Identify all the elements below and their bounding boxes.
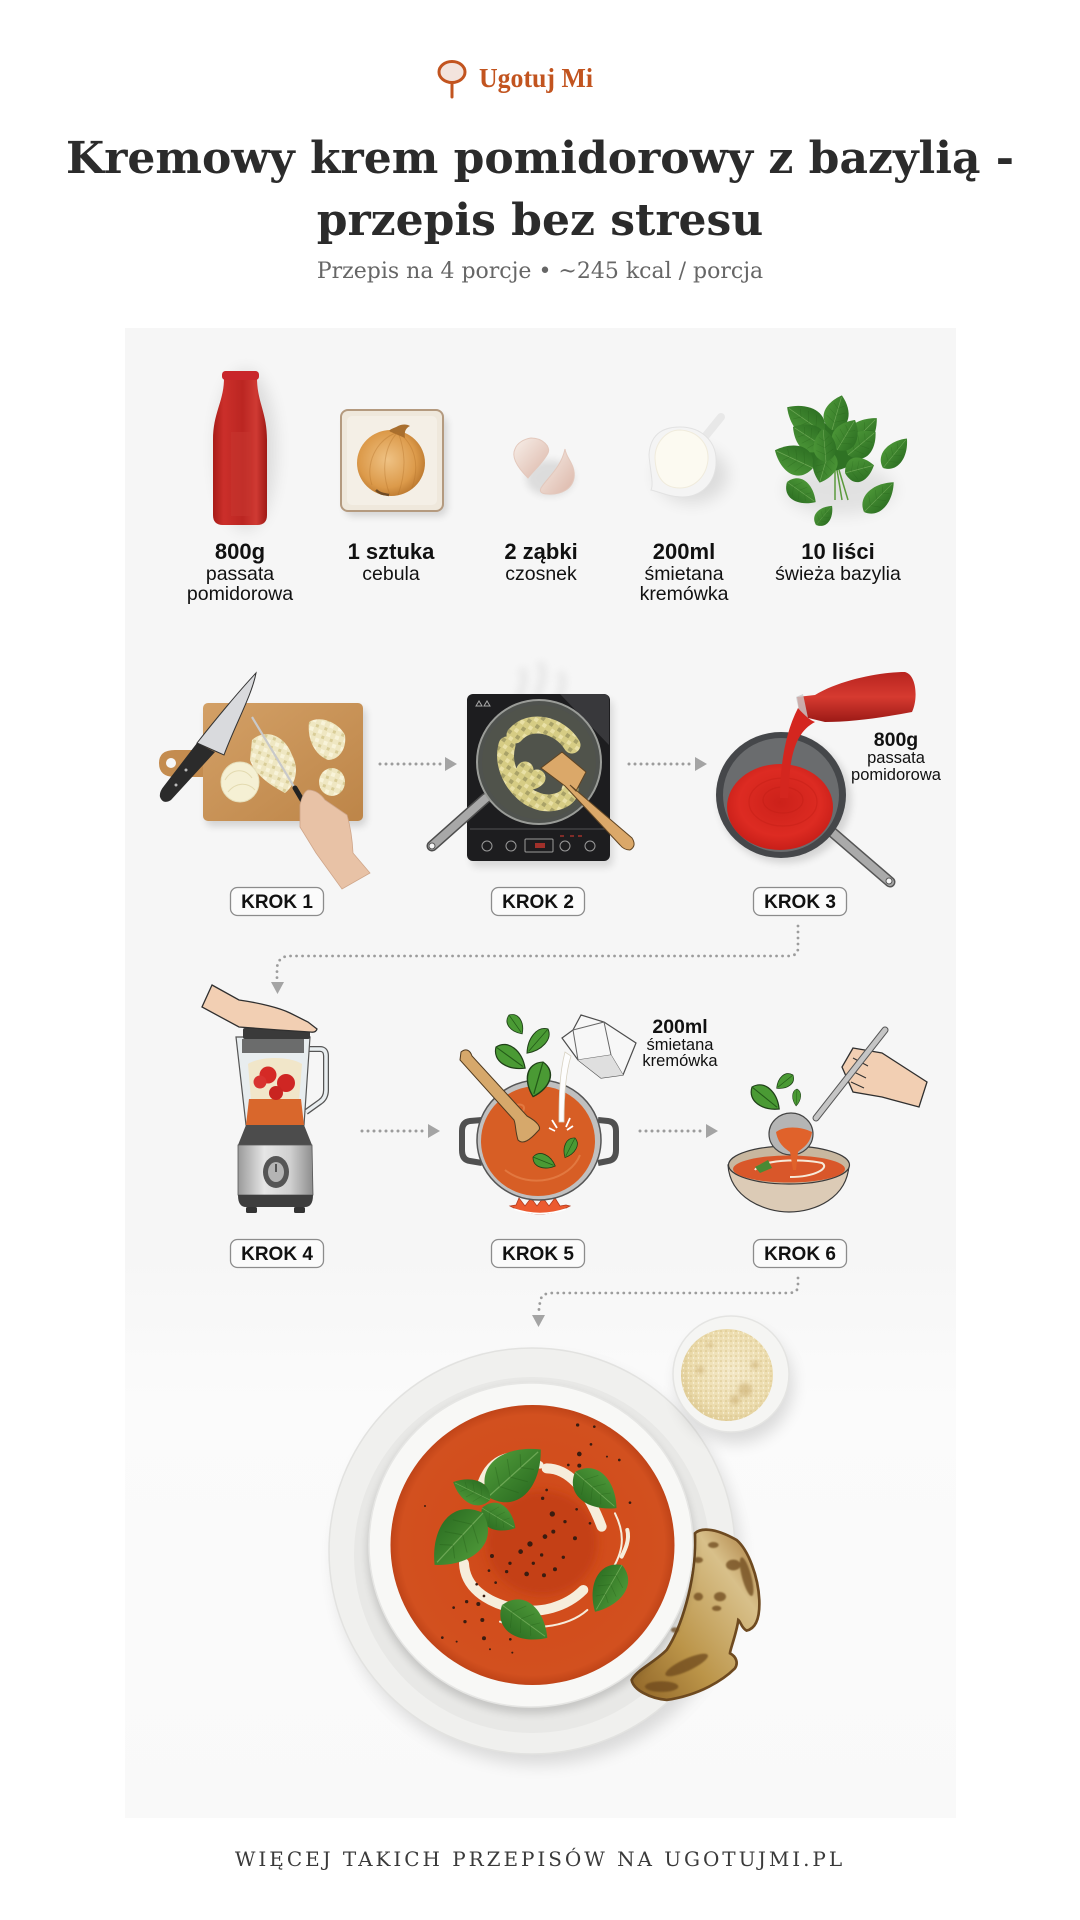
- wooden spoon: [460, 1050, 540, 1142]
- badge: KROK 5: [492, 1240, 584, 1268]
- basil garnish: [418, 1432, 636, 1652]
- arrow: step 4 to 5: [362, 1124, 440, 1138]
- label: 200ml śmietana kremówka: kremówka: [642, 1052, 718, 1070]
- ingredient: passata bottle: [213, 370, 276, 530]
- induction hob: [467, 694, 613, 867]
- ingredient: garlic cloves: [514, 438, 574, 496]
- ladle: [769, 1030, 885, 1170]
- step 2: frying on induction hob: [429, 662, 634, 867]
- badge: KROK 5: KROK 5: [502, 1244, 574, 1265]
- wooden spatula: [541, 752, 634, 850]
- arrow: step 1 to 2: [380, 757, 457, 771]
- badge: KROK 2: [492, 888, 584, 916]
- label: 1 sztuka cebula: 1 sztuka: [348, 539, 435, 564]
- badge: KROK 4: KROK 4: [241, 1244, 313, 1265]
- label: 800g passata pomidorowa: 800g: [874, 729, 918, 751]
- label: 1 sztuka cebula: [348, 539, 435, 585]
- chopped onion piles and half onion: [221, 719, 345, 802]
- label: 10 liści świeża bazylia: [775, 539, 901, 585]
- label: 800g passata pomidorowa: [187, 539, 293, 605]
- label: 800g passata pomidorowa: 800g: [215, 539, 265, 564]
- cream carton pouring: [549, 1015, 636, 1131]
- ingredient: basil leaves: [769, 392, 915, 530]
- label: 200ml śmietana kremówka: śmietana: [647, 1036, 714, 1054]
- badge: KROK 6: [754, 1240, 846, 1268]
- label: 200ml śmietana kremówka: śmietana: [644, 563, 724, 585]
- title: Kremowy krem pomidorowy z bazylią -: [66, 133, 1014, 184]
- badge: KROK 1: [230, 888, 324, 916]
- frying pan with onion: [429, 700, 601, 849]
- soup bowl: [367, 1383, 695, 1714]
- label: 200ml śmietana kremówka: kremówka: [640, 583, 729, 605]
- badge: KROK 3: [754, 888, 846, 916]
- label: 2 ząbki czosnek: 2 ząbki: [504, 539, 578, 564]
- hand holding ladle: [842, 1048, 927, 1107]
- small parmesan bowl: [673, 1316, 793, 1443]
- label: 800g passata pomidorowa: passata: [867, 749, 926, 767]
- step 6: serving into bowl: [728, 1030, 927, 1212]
- hand on lid: [202, 985, 317, 1032]
- pouring bottle: [780, 672, 916, 798]
- ingredient: cream jug: [649, 417, 728, 503]
- badge: KROK 1: KROK 1: [241, 892, 313, 913]
- label: 200ml śmietana kremówka: 200ml: [652, 1016, 708, 1038]
- label: 2 ząbki czosnek: czosnek: [505, 563, 577, 585]
- subtitle: Przepis na 4 porcje • ~245 kcal / porcja: [317, 259, 763, 284]
- arrow: step 3 to 4: [271, 926, 798, 994]
- badge: KROK 4: [230, 1240, 324, 1268]
- chef knife: [160, 673, 256, 802]
- label: 800g passata pomidorowa: pomidorowa: [851, 766, 942, 784]
- black pepper: [424, 1423, 631, 1654]
- arrow: step 2 to 3: [629, 757, 707, 771]
- badge: KROK 6: KROK 6: [764, 1244, 836, 1265]
- label: 800g passata pomidorowa: [851, 729, 942, 784]
- step badges row 2: [230, 1240, 846, 1268]
- label: 200ml śmietana kremówka: [642, 1016, 718, 1070]
- burner flame: [510, 1198, 570, 1214]
- plate: [329, 1348, 741, 1765]
- label: 800g passata pomidorowa: passata: [206, 563, 274, 585]
- title: [66, 133, 1014, 246]
- pan with sauce: [716, 732, 892, 884]
- label: 10 liści świeża bazylia: 10 liści: [801, 539, 875, 564]
- step 4: blender: [202, 985, 326, 1213]
- step 1: chopping onion: [159, 673, 370, 889]
- arrow: step 5 to 6: [640, 1124, 718, 1138]
- footer call to action: WIĘCEJ TAKICH PRZEPISÓW NA UGOTUJMI.PL: [235, 1847, 845, 1871]
- label: 200ml śmietana kremówka: 200ml: [653, 539, 715, 564]
- label: 1 sztuka cebula: cebula: [362, 563, 420, 585]
- arrow: step 6 to finished soup: [532, 1278, 798, 1327]
- finished dish: tomato soup: [329, 1316, 793, 1765]
- falling basil leaves: [490, 1011, 580, 1172]
- badge: KROK 2: KROK 2: [502, 892, 574, 913]
- basil leaves: [746, 1070, 801, 1117]
- icon: spoon: [439, 62, 465, 97]
- pot with soup: [462, 1080, 616, 1200]
- ingredients row: [187, 370, 915, 605]
- ingredient: onion on plate: [341, 410, 447, 516]
- cutting board: [159, 703, 366, 826]
- step 3: pouring passata: [716, 672, 942, 884]
- logo: Ugotuj Mi: [438, 60, 593, 98]
- blender: [236, 1028, 326, 1213]
- step badges row 1: [230, 888, 846, 916]
- cream swirl: [464, 1456, 628, 1627]
- panel: recipe illustration: [125, 328, 956, 1775]
- steam: [517, 662, 563, 720]
- title: przepis bez stresu: [317, 195, 763, 246]
- brand name: Ugotuj Mi: [479, 63, 593, 93]
- hand with knife: [252, 717, 370, 889]
- badge: KROK 3: KROK 3: [764, 892, 836, 913]
- label: 800g passata pomidorowa: pomidorowa: [187, 583, 293, 605]
- label: 200ml śmietana kremówka: [640, 539, 729, 605]
- label: 2 ząbki czosnek: [504, 539, 578, 585]
- step 5: adding cream to pot: [460, 1011, 718, 1214]
- toasted bread: [632, 1530, 759, 1700]
- label: 10 liści świeża bazylia: świeża bazylia: [775, 563, 901, 585]
- ceramic bowl: [728, 1146, 850, 1212]
